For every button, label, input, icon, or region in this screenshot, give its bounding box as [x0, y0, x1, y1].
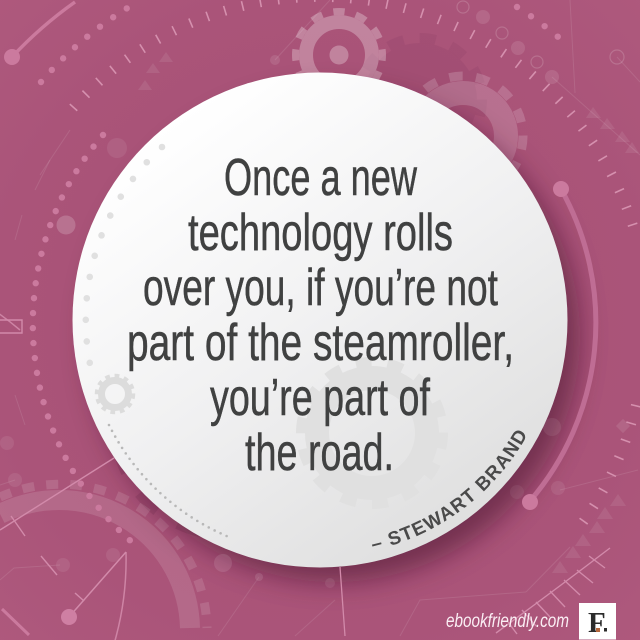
gear: bottom left: [0, 484, 207, 628]
gear: upper right: [403, 76, 523, 196]
website: ebookfriendly.com: [446, 611, 569, 632]
connector line with node: [61, 552, 126, 625]
bottom vertical line: [340, 567, 345, 636]
disc large gear: [301, 362, 443, 504]
gear: dark lower left: [115, 315, 335, 535]
disc small gear: [97, 376, 133, 412]
quote: Once a new: [224, 149, 417, 207]
quote: the road.: [245, 424, 394, 482]
gear: dark upper right: [358, 38, 482, 162]
bottom right crossed line: [496, 548, 610, 634]
outer dots: [41, 7, 564, 82]
quote: [127, 149, 514, 482]
logo: F: [588, 607, 606, 639]
quote: technology rolls: [188, 204, 453, 262]
lower left diagonal line: [0, 320, 114, 575]
quote: you’re part of: [210, 369, 430, 427]
inner dots: [33, 135, 133, 543]
logo: [579, 603, 616, 640]
large outer ring: [0, 258, 126, 640]
white disc: [72, 72, 568, 568]
disc grey dots: [86, 147, 162, 369]
tick marks: [73, 0, 636, 534]
author: – STEWART BRAND: [372, 430, 526, 546]
gear: top: [296, 12, 382, 98]
bottom left thick arc: [2, 609, 29, 635]
disc fine dotted arc: [109, 425, 229, 537]
top left thick arc: [4, 2, 75, 65]
quote: over you, if you’re not: [143, 259, 498, 317]
quote: part of the steamroller,: [127, 314, 514, 372]
faint triangles: [138, 52, 639, 573]
right thick arc: [522, 181, 596, 510]
faint rings: [457, 1, 624, 68]
disc shadow: [88, 90, 580, 582]
